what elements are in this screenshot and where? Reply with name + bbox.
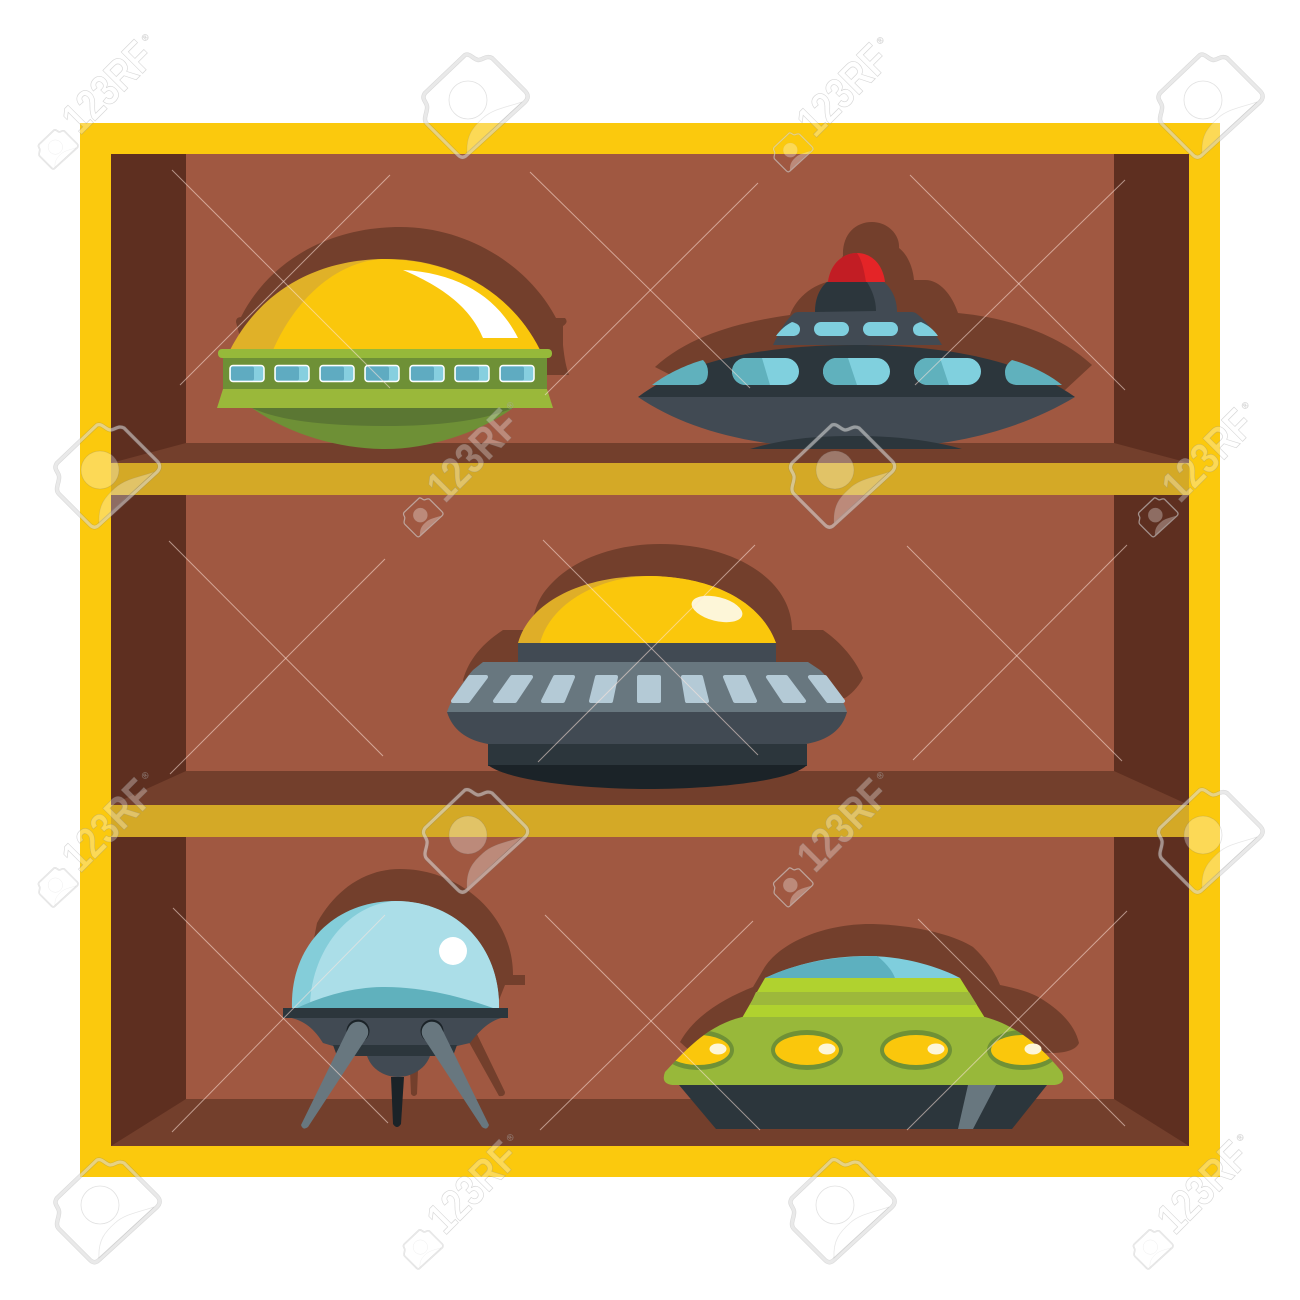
ufo 4 plate	[283, 1008, 508, 1018]
watermark text 8	[1133, 1131, 1258, 1269]
ufo 2: dark saucer with red beacon	[638, 222, 1092, 449]
watermark diagonal lines	[169, 170, 1127, 1132]
ufo 4 left leg	[301, 1020, 370, 1129]
ufo 4 shadow legs	[410, 1030, 505, 1096]
ufo 4 shadow	[300, 869, 525, 1010]
ufo 4 glass dome	[292, 901, 499, 1008]
ufo 5 shadow	[680, 924, 1079, 1060]
watermark text 1: 123RF	[52, 32, 163, 143]
ufo 2 turret	[815, 282, 897, 312]
ufo 3 dome light	[540, 576, 776, 643]
ufo 2 middle tier	[773, 312, 942, 345]
ufo 5 glass	[765, 956, 960, 978]
watermark text 3	[403, 399, 528, 537]
ufo 3 lower disc	[447, 712, 847, 744]
ufo 2 lower hull	[638, 397, 1075, 449]
watermark logo 7	[55, 1160, 160, 1262]
ufo 1 belly	[252, 408, 513, 449]
ufo 1 dome	[230, 259, 540, 350]
ufo 5 body	[664, 1017, 1063, 1085]
ufo 1: yellow dome green hull	[217, 227, 569, 449]
middle shelf surface	[111, 771, 1189, 805]
ufo 3 base underside	[488, 765, 807, 789]
watermark text 6: ®	[874, 769, 886, 781]
watermark text 3: 123RF	[417, 400, 528, 511]
ufo 3 neck	[518, 643, 776, 663]
watermark logo 3	[55, 425, 160, 527]
watermark text 2: ®	[874, 34, 886, 46]
ufo 2 red beacon	[828, 253, 885, 282]
ufo 4 bowl	[367, 1056, 430, 1077]
watermark text 6: 123RF	[787, 770, 898, 881]
ufo 5: green saucer with yellow lights	[662, 924, 1079, 1129]
watermark text 8: ®	[1234, 1131, 1246, 1143]
middle shelf front edge	[111, 805, 1189, 837]
ufo 1 lower flare	[217, 389, 553, 408]
ufo 1 dome highlight	[403, 270, 518, 338]
watermark text 1: ®	[139, 31, 151, 43]
ufo 4 highlight	[439, 937, 467, 965]
watermark text 6	[773, 769, 898, 907]
ufo 3 dome highlight	[689, 591, 745, 627]
ufo 2 red beacon shade	[828, 253, 866, 282]
watermark logo 1	[423, 55, 528, 157]
watermark text 7	[403, 1131, 528, 1269]
watermark text 2	[773, 34, 898, 172]
ufo 2 turret shade	[815, 282, 876, 312]
watermark text 4: 123RF	[1152, 400, 1263, 511]
ufo 5 glass shade	[765, 956, 895, 978]
ufo 3 shadow	[463, 544, 863, 698]
ufo 1 window band	[223, 356, 547, 390]
ufo 1 belly shade	[252, 408, 513, 426]
watermark text 2: 123RF	[787, 35, 898, 146]
right side wall	[1114, 154, 1189, 1146]
top shelf front edge	[111, 463, 1189, 495]
ufo 3 upper disc	[447, 662, 847, 712]
watermark logo 2	[1158, 55, 1263, 157]
ufo 4 dome light	[310, 901, 499, 1008]
ufo 4 right leg	[420, 1020, 489, 1129]
ufo 5 lights	[662, 1030, 1059, 1070]
ufo 2 upper hull	[638, 345, 1075, 397]
watermark text 5: 123RF	[52, 770, 163, 881]
watermark text 7: 123RF	[417, 1132, 528, 1243]
ufo 1 rim	[218, 349, 552, 358]
ufo 4 dome lower tint	[297, 987, 493, 1008]
watermark logo 5	[423, 790, 528, 892]
ufo 5 upper stripe	[750, 992, 977, 1005]
shelf unit	[80, 123, 1220, 1177]
ufo 4 band	[333, 1045, 457, 1056]
ufo 5 hull	[679, 1085, 1047, 1129]
ufo 1 dome light	[273, 259, 540, 350]
bottom floor surface	[111, 1099, 1189, 1146]
watermark text 1	[38, 31, 163, 169]
watermark text 4: ®	[1239, 399, 1251, 411]
watermark logo 8	[790, 1160, 895, 1262]
left side wall	[111, 154, 186, 1146]
ufo 1 windows	[230, 366, 534, 382]
watermark text 3: ®	[504, 399, 516, 411]
ufo 3 dome	[518, 576, 776, 643]
ufo 4: glass dome with legs	[283, 869, 525, 1129]
yellow outer frame	[80, 123, 1220, 1177]
ufo 1 shadow	[236, 227, 569, 375]
watermark text 8: 123RF	[1147, 1132, 1258, 1243]
ufo 3: yellow dome grey disc	[447, 544, 863, 789]
top shelf surface	[111, 443, 1189, 463]
ufo 2 shadow	[655, 222, 1092, 390]
watermark text 5	[38, 769, 163, 907]
ufo 5 hull strip	[958, 1085, 996, 1129]
ufo 3 base	[488, 744, 807, 766]
watermark text 4	[1138, 399, 1263, 537]
watermark text 7: ®	[504, 1131, 516, 1143]
ufo 5 upper tier	[742, 978, 985, 1018]
ufo 4 spike	[391, 1077, 404, 1127]
ufo 2 hull bottom shade	[750, 436, 962, 449]
ufo 2 small windows	[776, 322, 938, 336]
ufo 4 body	[287, 1017, 505, 1046]
watermark logo 4	[790, 425, 895, 527]
watermark logo 6	[1158, 790, 1263, 892]
back wall	[111, 154, 1189, 1146]
watermark text 5: ®	[139, 769, 151, 781]
ufo 3 windows	[453, 677, 843, 701]
ufo 2 large windows	[652, 358, 1062, 385]
